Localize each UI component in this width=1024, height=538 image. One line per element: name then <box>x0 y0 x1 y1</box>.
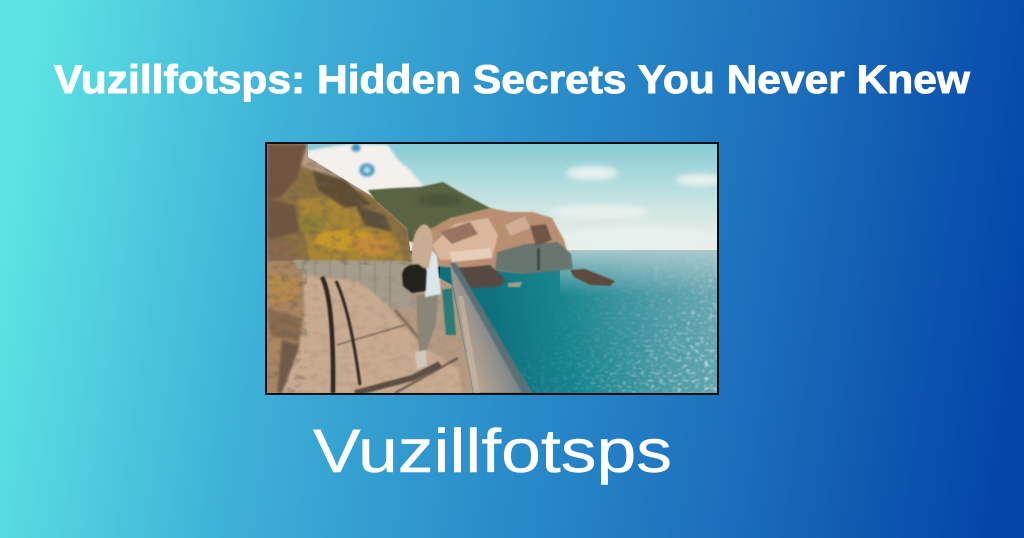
photo: coastal walkway with traveller <box>266 143 724 394</box>
photo frame <box>266 143 718 394</box>
left hillside <box>267 144 465 393</box>
title: Vuzillfotsps: Hidden Secrets You Never Knew <box>54 58 971 102</box>
land base <box>267 144 473 393</box>
sea <box>440 250 717 393</box>
railing posts <box>442 288 456 335</box>
railing <box>450 264 532 393</box>
clouds <box>300 144 424 200</box>
brand name: Vuzillfotsps <box>313 417 672 485</box>
sea glitter <box>522 254 717 393</box>
village and cliff <box>418 208 573 274</box>
walkway shadows <box>322 277 458 393</box>
stone fence <box>292 260 415 310</box>
paved walkway <box>282 275 462 393</box>
traveller <box>402 224 441 369</box>
overhanging rock <box>267 144 307 198</box>
distant hill <box>368 181 492 243</box>
rocky foreground <box>267 262 308 393</box>
sky <box>267 144 717 251</box>
shoreline rocks <box>458 265 615 288</box>
